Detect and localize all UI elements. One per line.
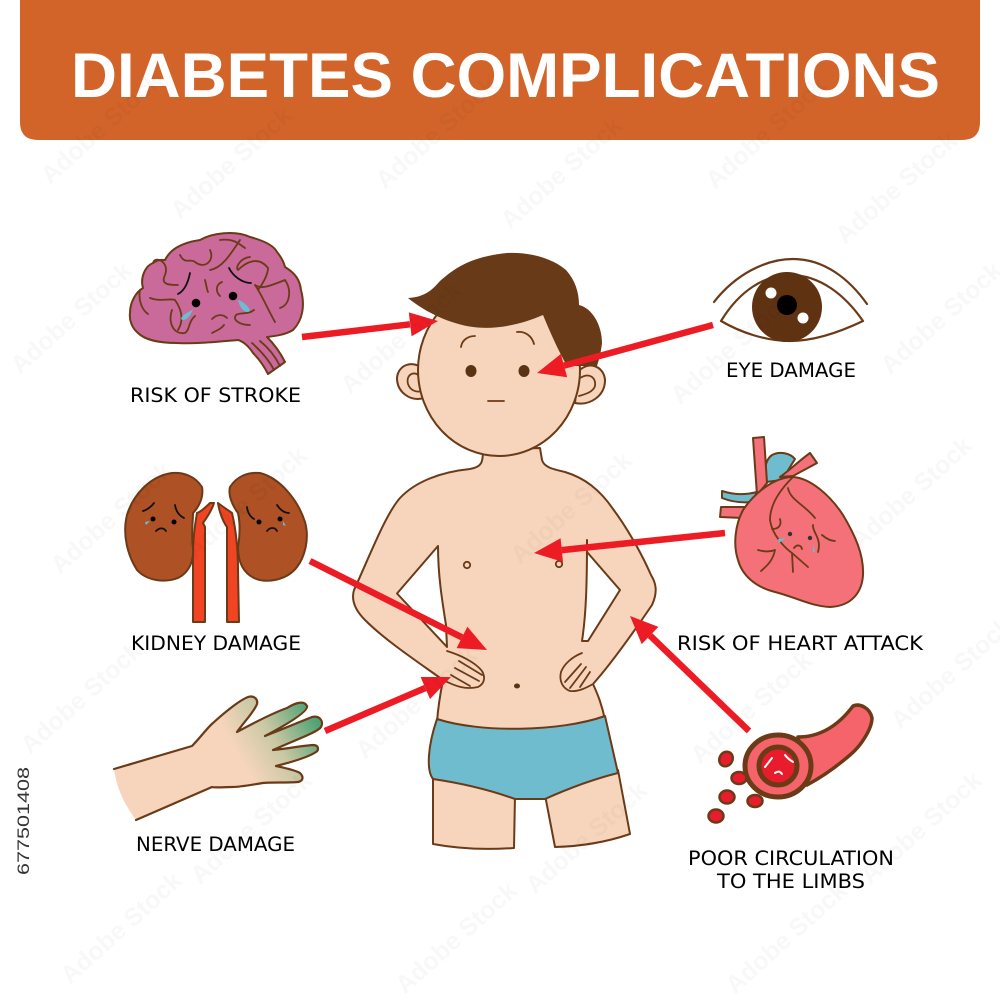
heart lines <box>758 478 835 572</box>
left hand <box>443 651 484 688</box>
title: DIABETES COMPLICATIONS <box>71 41 940 111</box>
watermark: Adobe Stock <box>855 766 988 889</box>
brain folds <box>139 240 289 333</box>
watermark: Adobe Stock <box>185 766 318 889</box>
label: nerve damage: NERVE DAMAGE <box>136 833 295 856</box>
shorts <box>429 716 618 799</box>
watermark: Adobe Stock <box>505 446 638 569</box>
label: kidney damage: KIDNEY DAMAGE <box>131 632 301 655</box>
body figure <box>353 253 656 849</box>
watermark: Adobe Stock <box>830 126 963 249</box>
watermark: Adobe Stock <box>685 646 818 769</box>
kidney faces <box>143 503 289 519</box>
watermark: Adobe Stock <box>390 876 523 999</box>
label: poor circulation <box>688 847 894 893</box>
watermark: Adobe Stock <box>370 71 503 194</box>
right ear <box>575 366 605 404</box>
watermark: Adobe Stock <box>350 641 483 764</box>
left ureter <box>193 503 214 622</box>
heart body <box>735 477 863 607</box>
label: poor circulation: TO THE LIMBS <box>716 870 865 893</box>
left leg <box>433 775 515 849</box>
label: poor circulation: POOR CIRCULATION <box>688 847 894 870</box>
arrow: kidney to abdomen <box>310 561 487 650</box>
watermark: Adobe Stock <box>55 866 188 989</box>
right leg <box>545 770 630 847</box>
vein top <box>753 437 767 495</box>
right kidney <box>229 473 307 581</box>
vessel opening <box>745 735 811 797</box>
label: risk of heart attack: RISK OF HEART ATTACK <box>677 632 924 655</box>
eyes <box>466 365 476 377</box>
heart face <box>772 519 802 549</box>
title banner <box>20 0 980 140</box>
watermark: Adobe Stock <box>165 101 298 224</box>
icon: hand <box>114 697 322 820</box>
watermark: Adobe Stock <box>520 776 653 899</box>
watermark: Adobe Stock <box>335 276 468 399</box>
stock id side text: 677501408 <box>14 767 33 875</box>
icon: blood vessel <box>708 705 872 822</box>
watermark: Adobe Stock <box>665 286 798 409</box>
watermark: Adobe Stock <box>5 256 138 379</box>
watermark: Adobe Stock <box>180 441 313 564</box>
right hand <box>560 653 593 691</box>
left arm gap <box>397 546 447 647</box>
hair <box>408 253 602 366</box>
torso and arms <box>353 448 656 745</box>
watermark: Adobe Stock <box>845 431 978 554</box>
right arm gap <box>582 540 620 641</box>
watermark: Adobe Stock <box>45 456 178 579</box>
left red vessel <box>720 507 750 518</box>
vessel tube <box>798 705 872 785</box>
left blue vessel <box>722 491 757 502</box>
aorta arch <box>765 453 795 482</box>
head <box>418 284 580 456</box>
artery right <box>780 453 817 477</box>
brain face <box>178 268 251 294</box>
left ear <box>397 364 424 399</box>
watermark: Adobe Stock <box>720 876 853 999</box>
blood cells <box>708 749 762 822</box>
left kidney <box>125 473 202 581</box>
icon: eye <box>714 259 867 342</box>
eyebrows and mouth <box>461 332 534 401</box>
nipples and navel <box>464 562 470 568</box>
icon: brain <box>130 233 303 374</box>
watermark: Adobe Stock <box>35 66 168 189</box>
arrow: heart to chest <box>534 533 725 562</box>
label: risk of stroke: RISK OF STROKE <box>130 384 301 407</box>
watermark: Adobe Stock <box>700 71 833 194</box>
icon: heart <box>720 437 863 607</box>
watermark: Adobe Stock <box>495 111 628 234</box>
arrow: hand to waist <box>325 677 451 731</box>
arrow: eye to face <box>537 325 713 377</box>
icon: kidneys <box>125 473 307 622</box>
label: eye damage: EYE DAMAGE <box>726 359 856 382</box>
watermark: Adobe Stock <box>15 636 148 759</box>
arrow: vessel to arm <box>630 616 749 731</box>
arrow: brain to head <box>302 312 438 337</box>
right ureter <box>218 503 239 622</box>
